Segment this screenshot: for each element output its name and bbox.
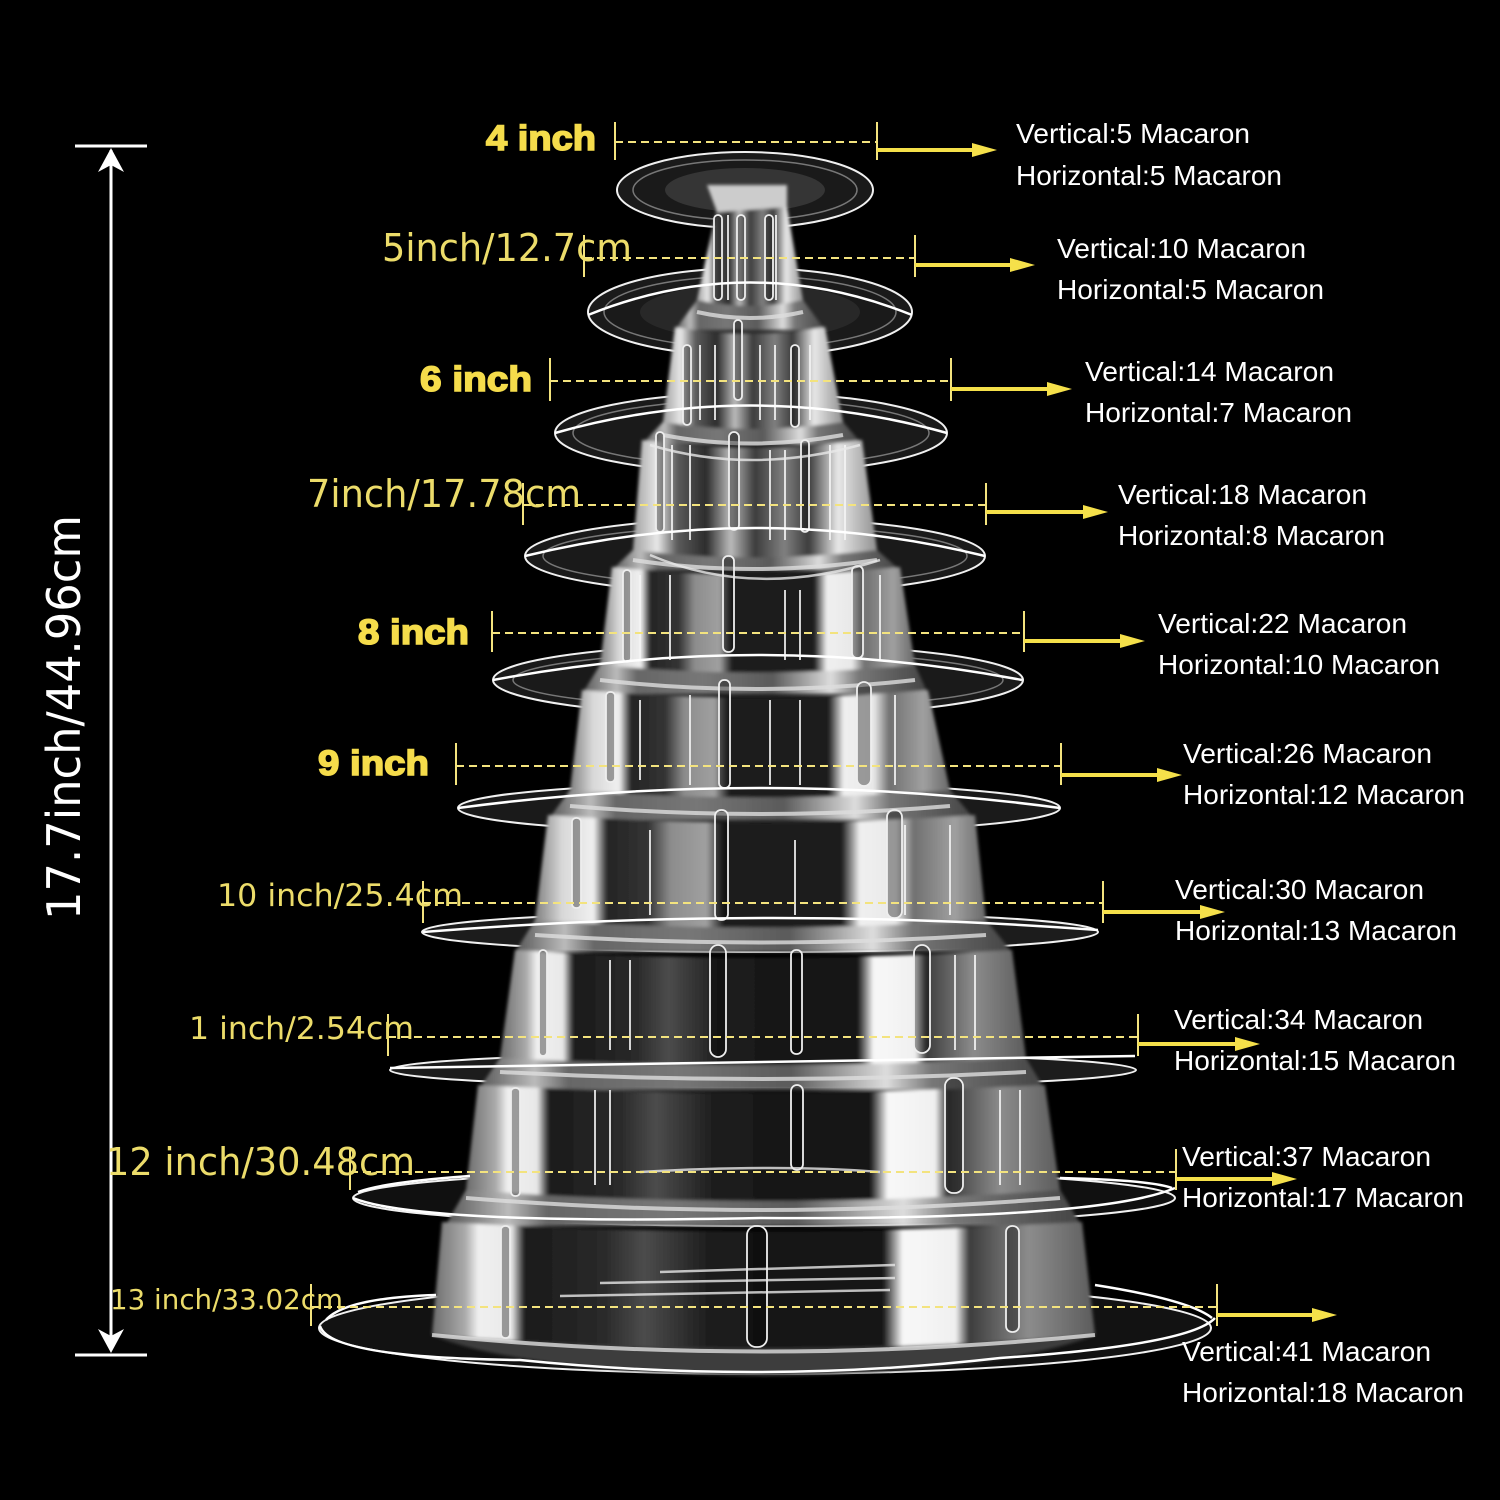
tier 4 dimension: Vertical:18 Macaron	[1118, 479, 1367, 510]
height label: 17.7inch/44.96cm	[37, 515, 91, 920]
cone slots	[501, 215, 1019, 1347]
tier 9 dimension: Horizontal:17 Macaron	[1182, 1182, 1464, 1213]
tier 10 dimension	[110, 1283, 1464, 1408]
tier 9 dimension: 12 inch/30.48cm	[106, 1140, 415, 1184]
tier 2 dimension: Vertical:10 Macaron	[1057, 233, 1306, 264]
tier 6 dimension	[318, 738, 1465, 810]
tier 4 dimension	[307, 472, 1385, 551]
tier 7 dimension: 10 inch/25.4cm	[217, 878, 463, 914]
tier 9 dimension	[106, 1140, 1464, 1213]
tier 1 dimension: Horizontal:5 Macaron	[1016, 160, 1282, 191]
cone seat bands	[432, 312, 1095, 1352]
macaron tower	[319, 152, 1215, 1376]
tier 1 dimension	[486, 118, 1282, 191]
height dimension arrow	[75, 146, 147, 1355]
cone reflections	[560, 215, 1020, 1296]
tier 9 dimension: Vertical:37 Macaron	[1182, 1141, 1431, 1172]
tier 8 dimension	[189, 1004, 1456, 1076]
tier 1 dimension: Vertical:5 Macaron	[1016, 118, 1250, 149]
tier 10 dimension: Vertical:41 Macaron	[1182, 1336, 1431, 1367]
tier 5 dimension	[358, 608, 1440, 680]
tier 5 dimension: 8 inch	[358, 613, 469, 652]
tier 4 dimension: 7inch/17.78cm	[307, 472, 581, 516]
tier 8 dimension: 1 inch/2.54cm	[189, 1011, 414, 1047]
tier 8 dimension: Horizontal:15 Macaron	[1174, 1045, 1456, 1076]
plate rim lines	[320, 282, 1215, 1372]
tier 7 dimension: Horizontal:13 Macaron	[1175, 915, 1457, 946]
tier 3 dimension	[420, 356, 1352, 428]
tier 6 dimension: Vertical:26 Macaron	[1183, 738, 1432, 769]
tier cones	[320, 185, 1215, 1376]
tier 2 dimension: Horizontal:5 Macaron	[1057, 274, 1324, 305]
tier 2 dimension: 5inch/12.7cm	[382, 226, 632, 270]
tier 6 dimension: Horizontal:12 Macaron	[1183, 779, 1465, 810]
tier 5 dimension: Horizontal:10 Macaron	[1158, 649, 1440, 680]
tier 10 dimension: Horizontal:18 Macaron	[1182, 1377, 1464, 1408]
tier 6 dimension: 9 inch	[318, 744, 429, 783]
tier 3 dimension: 6 inch	[420, 360, 532, 399]
tier plates	[319, 152, 1211, 1374]
tier 5 dimension: Vertical:22 Macaron	[1158, 608, 1407, 639]
tier 2 dimension	[382, 226, 1324, 305]
tier 10 dimension: 13 inch/33.02cm	[110, 1283, 343, 1316]
tier 3 dimension: Vertical:14 Macaron	[1085, 356, 1334, 387]
tier 7 dimension: Vertical:30 Macaron	[1175, 874, 1424, 905]
tier 4 dimension: Horizontal:8 Macaron	[1118, 520, 1385, 551]
tier 3 dimension: Horizontal:7 Macaron	[1085, 397, 1352, 428]
tier 1 dimension: 4 inch	[486, 119, 596, 158]
tier 8 dimension: Vertical:34 Macaron	[1174, 1004, 1423, 1035]
tier 7 dimension	[217, 874, 1457, 946]
